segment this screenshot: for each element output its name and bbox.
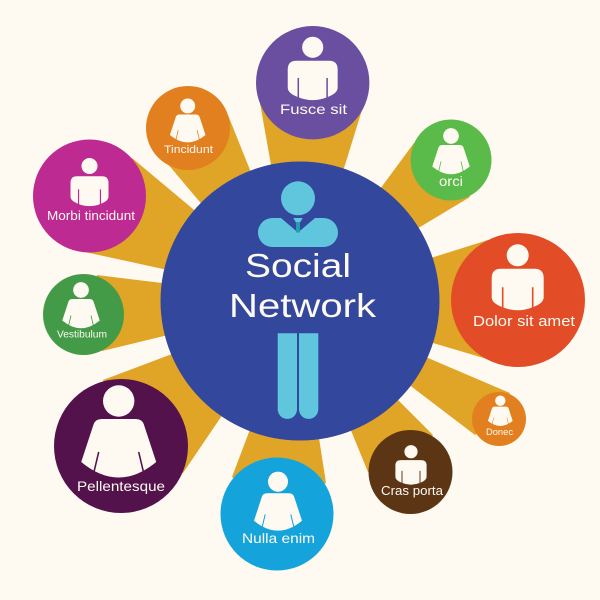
beam: orci (299, 143, 470, 301)
icon: person (488, 396, 513, 426)
circle: Donec (472, 392, 526, 446)
label: Cras porta: Cras porta (381, 483, 444, 498)
label: Dolor sit amet: Dolor sit amet (473, 313, 576, 330)
circle: Cras porta (368, 430, 452, 514)
icon: person (62, 282, 100, 328)
beam: Morbi tincidunt (85, 158, 299, 301)
icon: person (432, 128, 470, 174)
node: Fusce sit (256, 26, 369, 301)
heading: Network: Network (229, 287, 377, 324)
label: Nulla enim: Nulla enim (242, 530, 315, 546)
node: Morbi tincidunt (33, 140, 299, 301)
circle: Fusce sit (256, 26, 369, 139)
circle: Nulla enim (220, 458, 334, 570)
legs (278, 333, 318, 419)
circle: Morbi tincidunt (33, 140, 146, 252)
beam: Dolor sit amet (299, 240, 518, 359)
beam: Donec (299, 301, 510, 435)
tie (293, 218, 303, 232)
circle: Dolor sit amet (451, 233, 585, 367)
beam: Fusce sit (260, 83, 362, 301)
icon: person (492, 244, 544, 310)
node: Tincidunt (146, 86, 299, 301)
icon: person (254, 472, 302, 531)
node: Dolor sit amet (299, 233, 585, 367)
circle: Vestibulum (43, 274, 124, 355)
node: Vestibulum (43, 274, 299, 355)
beam: Tincidunt (167, 115, 299, 301)
node: Pellentesque (54, 301, 299, 513)
panel: central circle (160, 162, 440, 440)
hub circle (160, 162, 440, 440)
torso (258, 218, 338, 247)
label: Fusce sit: Fusce sit (280, 101, 347, 117)
label: Donec: Donec (486, 427, 513, 438)
heading: Social: Social (245, 247, 351, 284)
icon: central person (258, 181, 338, 419)
node: orci (299, 120, 492, 301)
label: Pellentesque: Pellentesque (77, 478, 165, 494)
node: Cras porta (299, 301, 452, 514)
label: Vestibulum: Vestibulum (57, 328, 107, 340)
node: Donec (299, 301, 526, 446)
beam: Cras porta (299, 301, 433, 472)
icon: person (288, 37, 338, 100)
label: Morbi tincidunt: Morbi tincidunt (47, 208, 135, 223)
head (281, 181, 315, 215)
icon: person (395, 445, 427, 485)
icon: person (71, 158, 108, 206)
beam: Pellentesque (103, 301, 299, 473)
label: Tincidunt: Tincidunt (164, 144, 213, 156)
circle: orci (410, 120, 492, 200)
icon: person (81, 385, 156, 478)
node: Nulla enim (220, 301, 334, 570)
beam: Nulla enim (232, 301, 326, 514)
icon: person (170, 99, 206, 142)
circle: Tincidunt (146, 86, 230, 170)
label: orci: orci (439, 174, 463, 189)
circle: Pellentesque (54, 379, 188, 513)
beam: Vestibulum (84, 275, 299, 351)
